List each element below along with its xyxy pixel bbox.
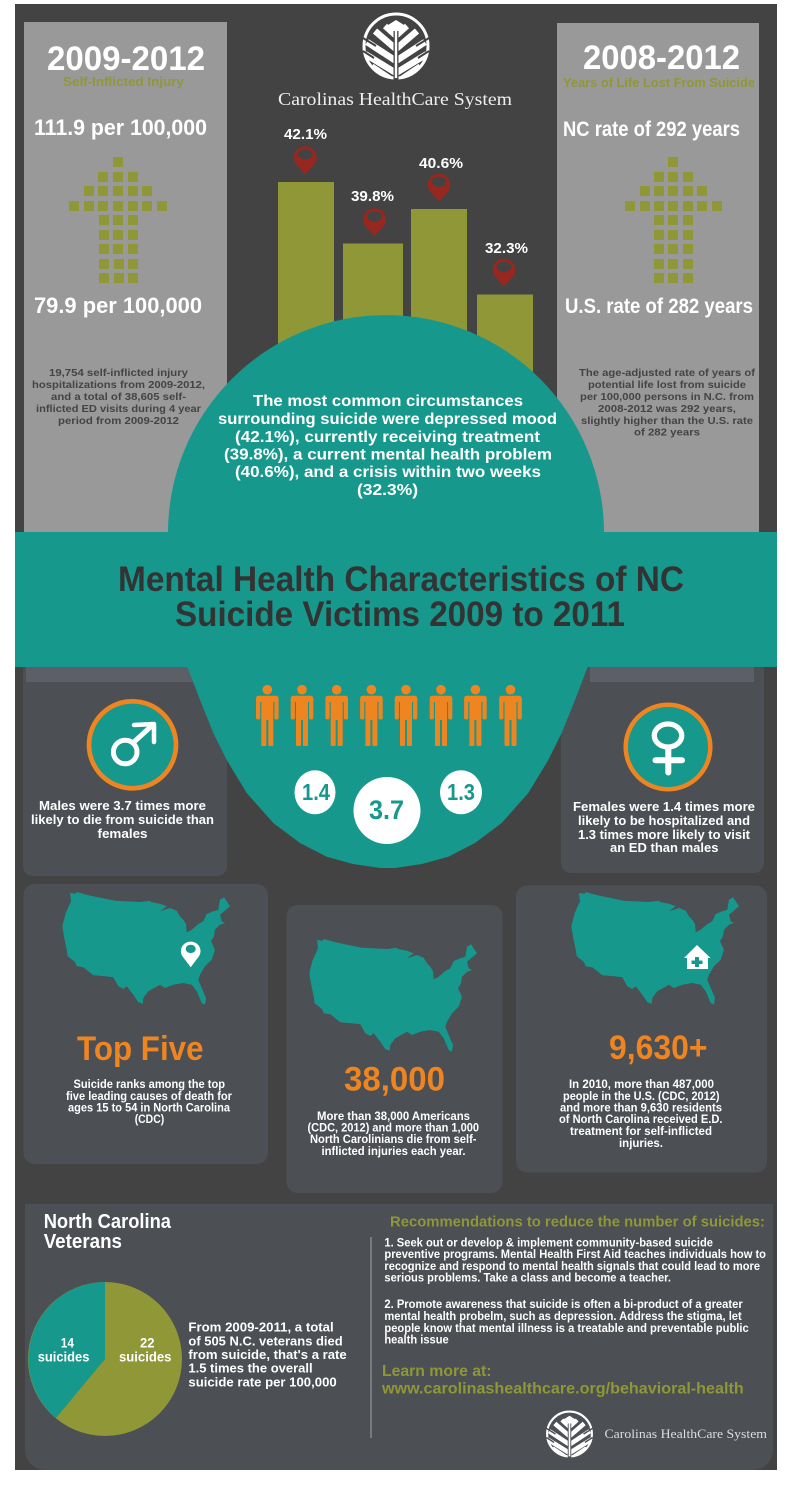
- teal banner: [15, 532, 777, 667]
- big stat: 9,630+: 9,630+: [609, 1029, 708, 1067]
- text block: age-adjusted rate: potential life lost from suicide: [588, 379, 746, 391]
- text block: circumstances: [218, 393, 557, 499]
- text block: 9,630: treatment for self-inflicted: [570, 1126, 712, 1138]
- text block: recommendation 2: [384, 1299, 749, 1347]
- text block: 38,000: More than 38,000 Americans: [317, 1111, 470, 1123]
- panel: females card: [561, 650, 764, 873]
- map: United States: [309, 939, 477, 1052]
- badge: 3.7: [354, 777, 420, 844]
- heading: North Carolina Veterans: North Carolina: [44, 1211, 172, 1233]
- text block: age-adjusted rate: The age-adjusted rate of years of: [579, 367, 756, 379]
- link: learn more: Learn more at:: [382, 1363, 492, 1380]
- text block: 9,630: and more than 9,630 residents: [560, 1103, 722, 1115]
- map: United States with pin: [62, 892, 230, 1005]
- text block: hospitalizations: 19,754 self-inflicted injury: [49, 367, 188, 379]
- text block: circumstances: surrounding suicide were depressed mood: [218, 411, 557, 428]
- text block: females: Females were 1.4 times more: [573, 800, 755, 814]
- icon: female symbol: [626, 705, 710, 789]
- big stat: 38,000: 38,000: [344, 1061, 445, 1099]
- badge: 1.3: 1.3: [447, 779, 475, 805]
- text block: recommendation 2: health issue: [384, 1335, 449, 1347]
- text block: females: [573, 800, 755, 855]
- logo: Carolinas HealthCare System: [278, 14, 512, 109]
- heading: recommendations: Recommendations to reduce the number of suicides:: [390, 1215, 765, 1231]
- panel: 38,000: [286, 905, 502, 1193]
- panel: veterans and recommendations: [25, 1204, 773, 1470]
- text block: veterans: from suicide, that's a rate: [188, 1347, 347, 1362]
- bar label: 39.8%: [351, 189, 394, 236]
- panel: top five: [24, 884, 268, 1164]
- text block: 9,630: injuries.: [619, 1138, 663, 1150]
- pie label: 14 suicides: suicides: [38, 1350, 89, 1365]
- stat: US rate: 79.9 per 100,000: [34, 293, 202, 318]
- link: learn more: www.carolinashealthcare.org/behavioral-health: [381, 1380, 744, 1397]
- stat: US rate of years: U.S. rate of 282 years: [565, 295, 753, 318]
- text block: 9,630: In 2010, more than 487,000: [569, 1079, 714, 1091]
- text block: recommendation 1: preventive programs. Mental Health First Aid teaches individuals how to: [384, 1249, 766, 1261]
- text block: hospitalizations: inflicted ED visits during 4 year: [36, 403, 201, 415]
- text block: 38,000: North Carolinians die from self-: [310, 1134, 477, 1146]
- pie label: 22 suicides: 22: [140, 1336, 154, 1351]
- map: United States with hospital: [571, 892, 739, 1005]
- subheading: years of life lost: Years of Life Lost From Suicide: [563, 75, 755, 90]
- bar label: 39.8%: 39.8%: [351, 189, 394, 205]
- text block: circumstances: (32.3%): [357, 482, 418, 499]
- text block: veterans: of 505 N.C. veterans died: [188, 1334, 343, 1349]
- text block: 9,630: people in the U.S. (CDC, 2012): [563, 1091, 720, 1103]
- text block: circumstances: (42.1%), currently receiving treatment: [235, 429, 541, 446]
- text block: top five: five leading causes of death for: [66, 1091, 233, 1103]
- text block: veterans: 1.5 times the overall: [188, 1361, 313, 1376]
- text block: recommendation 1: serious problems. Take a class and become a teacher.: [384, 1273, 671, 1285]
- heading: North Carolina Veterans: [44, 1211, 172, 1253]
- text block: recommendation 1: [384, 1238, 766, 1285]
- panel: males card: [23, 650, 227, 876]
- panel: years of life lost: [557, 23, 759, 534]
- icon row: eight people: [256, 685, 522, 746]
- badge: 1.3: [440, 770, 482, 814]
- badge: 1.4: 1.4: [302, 779, 330, 805]
- icon: leaf emblem: [363, 14, 429, 82]
- bar label: 32.3%: [485, 241, 528, 286]
- text block: hospitalizations: [32, 367, 205, 427]
- pie label: 14 suicides: [38, 1336, 89, 1365]
- text block: age-adjusted rate: [579, 367, 756, 438]
- text block: 38,000: (CDC, 2012) and more than 1,000: [308, 1123, 479, 1135]
- text block: hospitalizations: period from 2009-2012: [58, 415, 179, 427]
- text block: age-adjusted rate: of 282 years: [634, 426, 700, 438]
- icon: dotted up arrow: [625, 157, 722, 283]
- text block: age-adjusted rate: slightly higher than the U.S. rate: [581, 415, 753, 427]
- text block: 9,630: [559, 1079, 722, 1150]
- text block: veterans: [188, 1320, 347, 1389]
- dome: common circumstances: [168, 315, 604, 533]
- text block: age-adjusted rate: per 100,000 persons in N.C. from: [580, 391, 754, 403]
- text block: top five: [66, 1079, 233, 1126]
- subheading: self-inflicted injury: Self-Inflicted Injury: [63, 74, 185, 89]
- link: learn more: [381, 1363, 744, 1397]
- badge: 3.7: 3.7: [369, 795, 404, 825]
- panel: 9,630+: [516, 886, 767, 1172]
- heading: 2008-2012: 2008-2012: [583, 39, 740, 77]
- text block: females: likely to be hospitalized and: [578, 814, 750, 828]
- pie label: 22 suicides: suicides: [119, 1350, 171, 1365]
- logo: footer: [546, 1412, 767, 1459]
- icon: location pin: [181, 942, 200, 967]
- text block: 38,000: [308, 1111, 479, 1158]
- stat: NC rate of years: NC rate of 292 years: [563, 118, 740, 141]
- text block: recommendation 2: people know that mental illness is a treatable and preventable public: [384, 1323, 749, 1335]
- text block: circumstances: (40.6%), and a crisis within two weeks: [235, 464, 541, 481]
- heading: North Carolina Veterans: Veterans: [44, 1231, 122, 1253]
- bar label: 40.6%: [419, 156, 463, 202]
- text block: females: an ED than males: [610, 841, 719, 855]
- icon: male symbol: [89, 701, 176, 788]
- text block: veterans: From 2009-2011, a total: [188, 1320, 334, 1335]
- text block: veterans: suicide rate per 100,000: [188, 1374, 337, 1389]
- panel: self-inflicted injury: [24, 22, 227, 534]
- bar label: 40.6%: 40.6%: [419, 156, 463, 172]
- badge: 1.4: [294, 770, 336, 814]
- big stat: top five: Top Five: [77, 1030, 204, 1068]
- text block: hospitalizations: and a total of 38,605 self-: [51, 391, 187, 403]
- text block: hospitalizations: hospitalizations from 2009-2012,: [32, 379, 205, 391]
- text block: recommendation 1: recognize and respond to mental health signals that could lead to more: [384, 1261, 760, 1273]
- teal bowl with gender ratios: [187, 666, 588, 868]
- pie label: 22 suicides: [119, 1336, 171, 1365]
- text block: recommendation 2: 2. Promote awareness that suicide is often a bi-product of a greater: [384, 1299, 743, 1311]
- bar chart: circumstances: [278, 127, 533, 414]
- title: [118, 560, 684, 634]
- text block: recommendation 2: mental health probelm, such as depression. Address the stigma, let: [384, 1311, 742, 1323]
- text block: recommendation 1: 1. Seek out or develop & implement community-based suicide: [384, 1238, 713, 1250]
- bar label: 32.3%: 32.3%: [485, 241, 528, 257]
- text block: 9,630: of North Carolina received E.D.: [559, 1114, 722, 1126]
- text block: 38,000: inflicted injuries each year.: [322, 1146, 466, 1158]
- text block: males: [31, 799, 214, 841]
- title: Suicide Victims 2009 to 2011: [175, 595, 625, 634]
- title: Mental Health Characteristics of NC: [118, 560, 684, 599]
- pie chart: veteran suicides: [28, 1282, 182, 1436]
- icon: hospital house: [684, 945, 710, 969]
- text block: top five: Suicide ranks among the top: [74, 1079, 225, 1091]
- text block: males: likely to die from suicide than: [31, 813, 214, 827]
- text block: females: 1.3 times more likely to visit: [578, 828, 751, 842]
- bar label: 42.1%: [284, 127, 327, 174]
- text block: top five: (CDC): [135, 1114, 164, 1126]
- icon: dotted up arrow: [69, 157, 167, 283]
- logo: footer: Carolinas HealthCare System: [604, 1426, 767, 1441]
- text block: circumstances: The most common circumstances: [253, 393, 523, 410]
- pie label: 14 suicides: 14: [61, 1336, 74, 1351]
- heading: 2009-2012: 2009-2012: [47, 40, 205, 78]
- logo wordmark: Carolinas HealthCare System: [278, 89, 512, 109]
- bar label: 42.1%: 42.1%: [284, 127, 327, 143]
- text block: age-adjusted rate: 2008-2012 was 292 years,: [598, 403, 736, 415]
- stat: NC rate: 111.9 per 100,000: [34, 115, 207, 140]
- text block: top five: ages 15 to 54 in North Carolina: [68, 1103, 231, 1115]
- text block: circumstances: (39.8%), a current mental health problem: [224, 446, 552, 464]
- text block: males: Males were 3.7 times more: [39, 799, 206, 813]
- text block: males: females: [98, 827, 148, 841]
